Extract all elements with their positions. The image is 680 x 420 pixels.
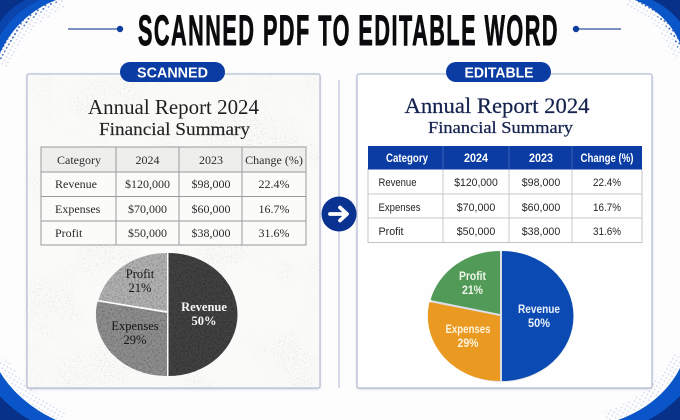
- table: editable: $38,000: [522, 226, 560, 238]
- pie labels: scanned: [111, 267, 227, 347]
- subheading: financial summary editable: Financial Summary: [428, 118, 574, 137]
- pie labels: scanned: Profit: [126, 267, 155, 281]
- table: editable: 22.4%: [593, 177, 621, 189]
- corner decoration: bottom right: [606, 356, 680, 420]
- table: editable: Revenue: [378, 177, 416, 189]
- scan speckle texture: [28, 75, 319, 387]
- arrow button: [322, 196, 356, 232]
- pie labels: editable: 21%: [462, 285, 483, 297]
- table: scanned: Profit: [55, 226, 83, 240]
- title accent: left line and dot: [68, 26, 123, 32]
- table: scanned: [41, 147, 306, 245]
- table: editable: $70,000: [457, 202, 495, 214]
- pie labels: scanned: 29%: [124, 333, 146, 347]
- table: editable: 31.6%: [593, 226, 621, 238]
- table: editable: Profit: [378, 226, 404, 238]
- table: scanned: Category: [57, 153, 101, 167]
- table header row: Change (%): [580, 153, 634, 165]
- table: scanned: $50,000: [128, 226, 167, 240]
- table: scanned: 2024: [136, 153, 160, 167]
- table: scanned: Revenue: [55, 177, 97, 191]
- badge: editable: [446, 62, 551, 82]
- pie labels: editable: 50%: [528, 318, 550, 330]
- table: scanned: 2023: [199, 153, 223, 167]
- divider line: [338, 80, 340, 388]
- table: scanned: 31.6%: [258, 226, 290, 240]
- heading: annual report editable: Annual Report 2024: [404, 93, 590, 118]
- pie labels: scanned: Revenue: [181, 300, 227, 314]
- table: scanned: 16.7%: [258, 202, 290, 216]
- pie labels: scanned: 50%: [192, 314, 216, 328]
- pie chart: editable: [428, 251, 574, 382]
- pie labels: editable: 29%: [458, 338, 478, 350]
- table: editable: $60,000: [522, 202, 560, 214]
- table: editable: $50,000: [457, 226, 495, 238]
- table: editable: 16.7%: [593, 202, 621, 214]
- table header row: Category: [386, 153, 428, 165]
- panel: editable document: [357, 74, 652, 388]
- corner decoration: top right: [628, 0, 680, 58]
- pie labels: editable: Expenses: [446, 324, 490, 336]
- pie chart: scanned: [96, 253, 238, 376]
- table header row: [368, 146, 642, 170]
- pie labels: editable: Profit: [459, 271, 486, 283]
- title accent: right line and dot: [573, 26, 621, 32]
- table: scanned: $70,000: [128, 202, 167, 216]
- badge: editable: EDITABLE: [464, 66, 534, 82]
- panel: scanned document: [27, 74, 320, 388]
- table: scanned: Change (%): [245, 153, 303, 167]
- table header row: 2023: [529, 153, 553, 165]
- corner decoration: top left: [0, 0, 64, 66]
- table: editable: [368, 146, 642, 242]
- table: editable: Expenses: [378, 202, 421, 214]
- badge: scanned: [120, 62, 225, 82]
- table: editable: $98,000: [522, 177, 560, 189]
- table: scanned: 22.4%: [258, 177, 290, 191]
- pie labels: editable: [446, 271, 560, 350]
- table: editable: $120,000: [454, 177, 498, 189]
- pie labels: scanned: 21%: [129, 281, 151, 295]
- table header row: 2024: [464, 153, 489, 165]
- table: scanned: $120,000: [125, 177, 170, 191]
- pie labels: editable: Revenue: [518, 304, 560, 316]
- table: scanned: $60,000: [192, 202, 230, 216]
- corner decoration: bottom left: [0, 360, 64, 420]
- table: scanned: $38,000: [192, 226, 230, 240]
- table: scanned: $98,000: [192, 177, 230, 191]
- badge: scanned: SCANNED: [137, 66, 208, 82]
- heading: annual report scanned: Annual Report 2024: [88, 95, 259, 119]
- table: scanned: Expenses: [55, 202, 101, 216]
- subheading: financial summary scanned: Financial Summary: [99, 119, 250, 139]
- pie labels: scanned: Expenses: [111, 319, 159, 333]
